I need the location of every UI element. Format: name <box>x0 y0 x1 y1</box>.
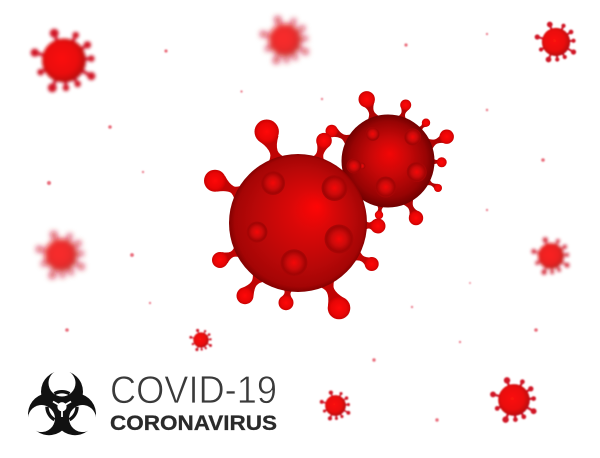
icon: biohazard symbol <box>28 372 96 436</box>
blurred virus: bottom right <box>490 377 537 423</box>
title: COVID-19: COVID-19 <box>110 369 277 412</box>
large main virus <box>204 120 386 319</box>
blurred virus: top centre <box>260 16 308 64</box>
blurred virus: middle left <box>36 231 84 279</box>
large virus body <box>229 154 367 292</box>
blurred virus: top left <box>31 29 95 92</box>
small virus body <box>342 114 434 208</box>
blurred virus: middle right <box>531 237 570 275</box>
subtitle: CORONAVIRUS: CORONAVIRUS <box>110 411 277 435</box>
blurred virus: small lower left <box>189 329 212 351</box>
blurred virus: small bottom centre <box>320 391 350 420</box>
small main virus <box>326 91 454 225</box>
scattered background particles <box>47 33 545 422</box>
blurred virus: top right <box>535 22 576 62</box>
